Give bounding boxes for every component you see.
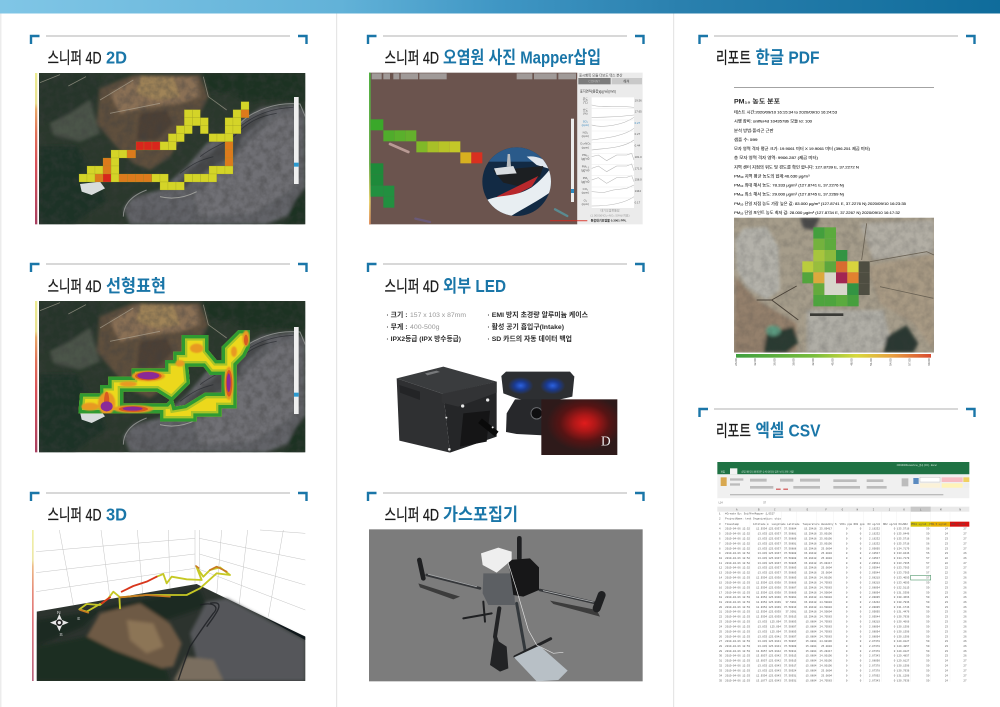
heading: Mapper photo: 스니퍼 4D: [384, 48, 439, 68]
column headers: G: [842, 508, 844, 511]
column headers: E: [807, 508, 809, 511]
column headers: K: [903, 508, 905, 511]
panel: report Excel CSV: [700, 408, 974, 682]
heading: report Excel: 엑셀 CSV: [756, 420, 821, 440]
compass: [50, 610, 80, 638]
drone photo: [369, 529, 643, 681]
spreadsheet rows: 20 2019-04-06 12:53 12.9354 125.0939 37.50913 15.29418 24.50804 0 0 2.09095 0 131.1746 59 23 26: [719, 606, 967, 609]
spreadsheet rows: 12 2019-04-06 12:52 13.833 125.0937 37.50885 15.29418 25.0804 0 0 2.09544 0 133.7365 57 22 27: [719, 567, 967, 570]
spreadsheet rows: 19 2019-04-06 12:53 12.9354 125.0939 37.5091 15.29418 24.50804 0 0 2.16232 0 130.7936 59 23 26: [719, 601, 967, 604]
spreadsheet rows: 29 2019-04-06 12:53 13.6957 125.0942 37.50911 15.0804 25.29417 0 0 2.07378 0 129.8127 59 23 26: [719, 650, 967, 653]
spreadsheet rows: 10 2019-04-06 12:52 13.833 125.0937 37.50888 15.29418 25.0804 0 0 2.10547 0 134.7179 57 22 26: [719, 557, 967, 560]
colour bar: 54.00: [888, 358, 892, 366]
panel: gas sampler: [368, 492, 644, 681]
sensor values: 171.0: [635, 166, 642, 170]
heading: report PDF: 리포트: [716, 48, 751, 68]
sensor labels: O₃+NO₂: [580, 142, 591, 146]
compass: N: [57, 610, 61, 616]
heading: linear expression: 선형표현: [106, 276, 166, 296]
colour bar: 57.00: [908, 358, 912, 366]
altitude slider: [571, 119, 574, 202]
heading: 3D: 스니퍼 4D: [48, 506, 102, 524]
heading: linear expression: [48, 276, 166, 296]
grid cells: [79, 102, 249, 190]
sensor labels: PM₂.₅: [582, 164, 589, 168]
report map: [734, 218, 934, 366]
spreadsheet rows: 28 2019-04-06 12:53 13.833 125.0941 37.50909 15.0804 25.0804 0 0 2.07378 0 129.4857 59 23 26: [719, 645, 967, 648]
spreadsheet screenshot: [717, 462, 969, 682]
concentration cells: [802, 227, 870, 306]
section bracket: [368, 493, 644, 501]
sensor labels: (㎍/㎥): [581, 180, 590, 184]
ships on map: [390, 144, 567, 222]
report rule: [734, 86, 934, 89]
compass: S: [59, 632, 63, 638]
spreadsheet rows: 18 2019-04-06 12:53 12.9354 125.0938 37.50891 15.29418 24.50804 0 0 2.09095 0 130.4666 59 23 26: [719, 596, 967, 599]
spreadsheet rows: 7 2019-04-06 12:52 13.833 125.0937 37.50891 15.29418 25.00196 0 0 2.16232 0 135.5716 56 23 27: [719, 542, 967, 545]
colour bar: 45.00: [830, 358, 834, 366]
spreadsheet rows: 26 2019-04-06 12:53 13.833 125.0941 37.50897 15.0804 24.70583 0 0 2.08094 0 130.1396 59 23 26: [719, 635, 967, 638]
sensor box: [481, 548, 512, 573]
section bracket: [700, 36, 974, 44]
device: angled view: [397, 367, 497, 453]
sensor labels: (ppm): [582, 202, 589, 206]
title bar: 삽입 페이지 레이아웃 수식 데이터 검토 보기 자동 저장: [741, 469, 794, 473]
ship photo: [480, 147, 553, 217]
sensor values: 0.17: [635, 200, 641, 204]
column headers: M: [940, 508, 942, 511]
spreadsheet rows: 23 2019-04-06 12:53 13.833 125.094 37.50893 15.0804 24.70583 0 0 2.08219 0 130.4666 59 23 26: [719, 621, 967, 624]
column headers: A: [736, 508, 738, 511]
sidebar: [577, 72, 643, 224]
sensor labels: (%): [583, 112, 588, 116]
section bracket: [368, 264, 644, 272]
colour bar: 42.00: [811, 358, 815, 366]
section bracket: [31, 264, 306, 272]
red callout line: [550, 219, 587, 222]
colour scale: [32, 530, 34, 681]
report text lines: PM₁₀ 지역 평균 농도의 합계:46.630 μg/m³: [734, 172, 810, 178]
colour bar: 32.00: [753, 358, 757, 366]
sensor values: 17.65: [635, 110, 642, 114]
hot spots: [101, 372, 231, 411]
sidebar: 대기오염물통합: [600, 208, 620, 213]
spec list: right: · EMI 방지 초경량 알루미늄 케이스: [488, 310, 588, 319]
spec list: right: · 활성 공기 흡입구(Intake): [488, 322, 564, 331]
report text lines: PM₁₀ 최대 해서 농도: 78.333 μg/m³ (127.8741 E, 37.2276 N): [734, 182, 845, 188]
spreadsheet rows: 25 2019-04-06 12:53 13.833 125.094 37.50895 15.0804 24.70583 0 0 2.08094 0 130.1396 59 23 26: [719, 630, 967, 633]
title bar: 20190406LowerLine_결과 (CC) - Excel: [897, 463, 937, 467]
colour bar: 26.00: [734, 358, 738, 366]
grid lines: [724, 512, 950, 682]
column headers: N: [959, 508, 961, 511]
report text lines: 테스트 시간:2020/09/10 16:15:34 to 2020/09/10 16:24:53: [734, 108, 838, 114]
title bar: [717, 462, 969, 474]
sensor labels: 습도: [583, 108, 588, 112]
report text lines: 샘플 수: 599: [734, 136, 758, 142]
spec list: left: · 크기 :: [386, 310, 408, 319]
sensor values: 19.56: [635, 98, 642, 102]
flight trail: [79, 566, 230, 613]
spreadsheet rows: 22 2019-04-06 12:53 12.9354 125.0939 37.50913 15.29418 24.70583 0 0 2.09544 0 130.7936 59 23 26: [719, 616, 967, 619]
spreadsheet rows: 2 ProjectName: test Organization: ukis: [719, 517, 781, 521]
spec list: left: 400-500g: [410, 324, 440, 331]
top colour band: [0, 0, 1000, 14]
sensor labels: (㎍/㎥): [581, 157, 590, 161]
inset: red LED: D: [601, 434, 611, 449]
column headers: D: [789, 508, 791, 511]
spreadsheet rows: 5 2019-04-06 12:52 13.833 125.0937 37.50881 15.29418 25.00196 0 0 2.16232 0 135.0446 59 24 27: [719, 533, 967, 536]
spreadsheet rows: 8 2019-04-06 12:52 13.833 125.0937 37.50888 15.29418 25.0804 0 0 2.09095 0 134.7179 56 23 27: [719, 547, 967, 550]
report text lines: PM₁₀ 단일 지점 농도 가장 높은 값: 83.000 μg/m³ (127.8741 E, 37.2276 N) 2020/09/10 16:23:35: [734, 200, 907, 206]
wall grid: [36, 530, 305, 617]
sidebar: 표지면적(중층)(㎍/㎥)(m/s): [580, 89, 616, 94]
spreadsheet rows: 31 2019-04-06 12:53 13.6957 125.0942 37.50915 15.0804 24.90196 0 0 2.08090 0 129.8127 59 24 27: [719, 660, 967, 663]
spreadsheet rows: 24 2019-04-06 12:53 13.833 125.094 37.50897 15.0804 24.70583 0 0 2.08094 0 130.1396 59 23 26: [719, 625, 967, 628]
sidebar: 해석: [623, 79, 629, 84]
sensor labels: (℃): [583, 101, 588, 105]
3D chart: [32, 530, 305, 681]
colour bar: 36.00: [772, 358, 776, 366]
compass: E: [77, 616, 80, 621]
spreadsheet rows: 35 2019-04-06 12:53 13.1077 125.0943 37.50931 15.0804 24.70583 0 0 2.07343 0 130.7936 59 24 27: [719, 679, 967, 682]
spreadsheet rows: 17 2019-04-06 12:53 12.9354 125.0938 37.50889 15.29418 24.50804 0 0 2.08094 0 131.5396 59 23 26: [719, 591, 967, 594]
heading: external LED: 스니퍼 4D: [384, 277, 439, 296]
column headers: J: [889, 508, 891, 511]
terrain: [37, 584, 305, 681]
heading: report PDF: [716, 48, 820, 68]
report heading: PM₁₀ 농도 분포: [734, 98, 780, 106]
colour bar: [734, 354, 931, 366]
spreadsheet rows: 13 2019-04-06 12:52 13.833 125.0937 37.50885 15.29418 25.0804 0 0 2.09544 0 133.7365 57 22 26: [719, 572, 967, 575]
formula bar: 57: [763, 502, 767, 504]
panel: external LED: [368, 263, 644, 455]
spreadsheet rows: 14 2019-04-06 12:53 12.9354 125.0938 37.50885 15.29418 24.90196 0 0 2.08219 0 133.4095 57 22 26: [719, 577, 967, 580]
report text lines: 분석 방법:폴리곤 근판: [734, 127, 774, 133]
formula bar: L14: [719, 502, 723, 504]
spreadsheet rows: 4 2019-04-06 12:52 12.9354 125.0937 37.50884 15.29418 25.09417 0 0 2.16232 0 135.5716 59 24 27: [719, 528, 967, 531]
ribbon: [717, 474, 969, 498]
heading: report Excel: 리포트: [716, 422, 751, 440]
sensor values: 158.0: [635, 177, 642, 181]
colour bar: 48.00: [850, 358, 854, 366]
sensor labels: PM₁: [583, 176, 588, 180]
panel: 2D: [31, 35, 306, 224]
formula bar: [717, 498, 969, 506]
spreadsheet rows: [719, 512, 967, 682]
spreadsheet rows: 33 2019-04-06 12:53 13.833 125.0943 37.50924 15.0804 25.0804 0 0 2.07378 0 130.7936 59 24 27: [719, 669, 967, 672]
sampling tube: [508, 563, 563, 653]
spreadsheet rows: 16 2019-04-06 12:53 12.9354 125.0938 37.50887 15.29418 24.70583 0 0 2.08094 0 132.5115 59 23 26: [719, 586, 967, 589]
section bracket: [31, 36, 306, 44]
section bracket: [31, 493, 306, 501]
map: contour heat band over aerial photo: [35, 301, 305, 452]
sensor values: 1344: [635, 189, 641, 193]
sidebar: 표시항목 모듈 더보도 텍스 분산: [579, 72, 623, 77]
column headers: F: [825, 508, 827, 511]
column headers: I: [873, 508, 875, 511]
heading: external LED: 외부 LED: [443, 276, 506, 296]
column headers: H: [857, 508, 859, 511]
colour scale: [369, 73, 371, 224]
spreadsheet rows: 34 2019-04-06 12:53 12.9354 125.0943 37.50931 15.0804 25.0804 0 0 2.07092 0 131.1206 59 24 27: [719, 674, 967, 677]
report text lines: PM₁₀ 최소 해서 농도: 29.000 μg/m³ (127.8745 E, 37.2269 N): [734, 191, 845, 197]
colour bar: 51.00: [869, 358, 873, 366]
title bar: 파일: [721, 469, 725, 473]
heading: report Excel: [716, 420, 821, 440]
inset: red LED: [541, 399, 617, 455]
panel: 3D: [31, 492, 306, 681]
landing gear: [495, 603, 551, 657]
sensor labels: (ppm): [582, 191, 589, 195]
highlighted header cells: [911, 522, 969, 527]
spreadsheet rows: 9 2019-04-06 12:52 13.833 125.0937 37.50888 15.29418 25.0804 0 0 2.10547 0 133.0446 56 23 26: [719, 552, 967, 555]
spec list: left: · 무게 :: [386, 322, 408, 331]
report text lines: PM₁₀ 단일 포인트 농도 최저 값: 28.000 μg/m³ (127.8734 E, 37.2267 N) 2020/09/10 16:17:32: [734, 209, 901, 215]
sensor labels: 온도: [583, 97, 588, 101]
sensor labels: CO₂: [583, 187, 588, 191]
report text lines: 모자 영역 격자 평균 크기: 19.9061 미터 X 19.9061 미터 (396.251 제곱 미터): [734, 145, 871, 151]
contour band: [77, 327, 299, 423]
altitude slider: [294, 97, 299, 184]
sensor values: 0.27: [635, 132, 641, 136]
drone arms: [419, 538, 602, 622]
heading: Mapper photo: [384, 48, 601, 68]
column headers: L: [920, 508, 922, 511]
grid cells: [371, 119, 482, 208]
sensor values: 181.0: [635, 155, 642, 159]
drone body: [483, 573, 515, 605]
sensor labels: (㎍/㎥): [581, 168, 590, 172]
sensor values: 0.44: [635, 144, 641, 148]
sensor labels: NO₂: [583, 130, 588, 134]
selected cell: [911, 575, 931, 580]
device: front view with blue LEDs: [501, 372, 574, 435]
device photos: [397, 367, 617, 455]
heading: gas sampler: 가스포집기: [443, 504, 518, 524]
sensor labels: [580, 97, 591, 206]
heading: 3D: 3D: [106, 504, 127, 524]
sensor labels: (ppm): [582, 123, 589, 127]
section bracket: [700, 409, 974, 417]
Mapper screenshot: [369, 72, 643, 224]
heading: report PDF: 한글 PDF: [756, 48, 820, 68]
spreadsheet rows: 6 2019-04-06 12:52 13.833 125.0937 37.50889 15.29418 25.00196 0 0 2.16232 0 135.5716 56 23 27: [719, 537, 967, 540]
spreadsheet rows: 30 2019-04-06 12:53 13.6957 125.0942 37.50913 15.0804 24.90196 0 0 2.07343 0 129.4857 59 23 26: [719, 655, 967, 658]
colour scale: [35, 73, 37, 224]
column headers: [717, 507, 969, 512]
panel: report PDF: [700, 35, 974, 366]
site: [824, 272, 847, 295]
sidebar: 통합대기오염물 0.3001 PPL: [591, 218, 627, 223]
sidebar: CONN?: [588, 80, 600, 84]
spreadsheet rows: 3 Timestamp Altitude m Longitude Latitude Temperature Humidity % VOCs ppm NO2 ppm O3 ug/m3 NO2 ug/m3 O3+NO2 PM10 ug/m3 PM2.5 ug/m3 PM1 ug/m3: [719, 522, 965, 526]
report text lines: [734, 108, 907, 215]
column headers: C: [774, 508, 776, 511]
spec list: right: [488, 310, 588, 343]
colour bar: 39.00: [792, 358, 796, 366]
colour bar: 60.00: [927, 358, 931, 366]
map: 2D grid over aerial photo: [35, 73, 305, 224]
panel: linear expression: [31, 263, 306, 452]
column headers: B: [758, 508, 760, 511]
sensor values: 0.27: [635, 121, 641, 125]
sidebar: (1.0000(NO₂+NO₂ 50%)/지표): [590, 213, 630, 218]
spreadsheet rows: 32 2019-04-06 12:53 13.833 125.0943 37.50917 15.0804 24.90196 0 0 2.07378 0 130.1396 59 24 27: [719, 665, 967, 668]
sampling bag: [514, 646, 568, 681]
spec list: left: · IPX2등급 (IPX 방수등급): [386, 334, 461, 343]
sensor labels: SO₂: [583, 119, 588, 123]
warm zones: [81, 330, 250, 415]
sensor labels: O₂: [584, 198, 587, 202]
spec list: left: 157 x 103 x 87mm: [410, 312, 467, 319]
toolbar: [372, 73, 576, 79]
altitude slider: [294, 327, 299, 414]
panel: pollution source photo in Mapper: [368, 35, 644, 224]
spreadsheet rows: 1 #Create By: SnifferMapper 1,0527: [719, 512, 775, 516]
spreadsheet rows: 11 2019-04-06 12:52 13.833 125.0937 37.50885 15.29418 25.09417 0 0 2.09544 0 133.7365 57 22 27: [719, 562, 967, 565]
heading: Mapper photo: 오염원 사진 Mapper삽입: [443, 48, 601, 68]
heading: gas sampler: 스니퍼 4D: [384, 506, 439, 524]
sensor labels: PM₁₀: [582, 153, 589, 157]
heading: 2D: 스니퍼 4D: [48, 48, 102, 68]
report text lines: 지역 센터 지점의 위도 및 경도를 확인 합니다: 127.8739 E, 37.2272 N: [734, 163, 859, 169]
sensor trend lines: [592, 105, 634, 206]
section bracket: [368, 36, 644, 44]
drone shadows: [418, 583, 600, 617]
sensor labels: (ppm): [582, 134, 589, 138]
heading: external LED: [384, 276, 506, 296]
spec list: right: · SD 카드의 자동 데이터 백업: [488, 334, 572, 343]
sensor values: [635, 98, 642, 204]
spreadsheet rows: 21 2019-04-06 12:53 12.9354 125.0939 37.5091 15.29418 24.50804 0 0 2.09095 0 131.4476 59 23 26: [719, 611, 967, 614]
colour scale: [35, 301, 37, 452]
spreadsheet rows: 15 2019-04-06 12:53 12.9354 125.0938 37.50886 15.29418 24.70583 0 0 2.08219 0 133.4095 59 22 26: [719, 581, 967, 584]
heading: gas sampler: [384, 504, 518, 524]
heading: linear expression: 스니퍼 4D: [48, 277, 102, 296]
report text lines: 총 모자 영역 격자 영역: 9906.287 (제곱 미터): [734, 154, 819, 160]
sensor labels: (ppm): [582, 145, 589, 149]
spec list: left: [386, 310, 467, 343]
report text lines: 시행 장비: sniffer4d 1043578b 모듈 Id: 100: [734, 118, 813, 124]
heading: 2D: 2D: [106, 48, 127, 68]
spreadsheet rows: 27 2019-04-06 12:53 13.833 125.0941 37.50897 15.0804 24.90196 0 0 2.07378 0 129.8127 59 23 26: [719, 640, 967, 643]
